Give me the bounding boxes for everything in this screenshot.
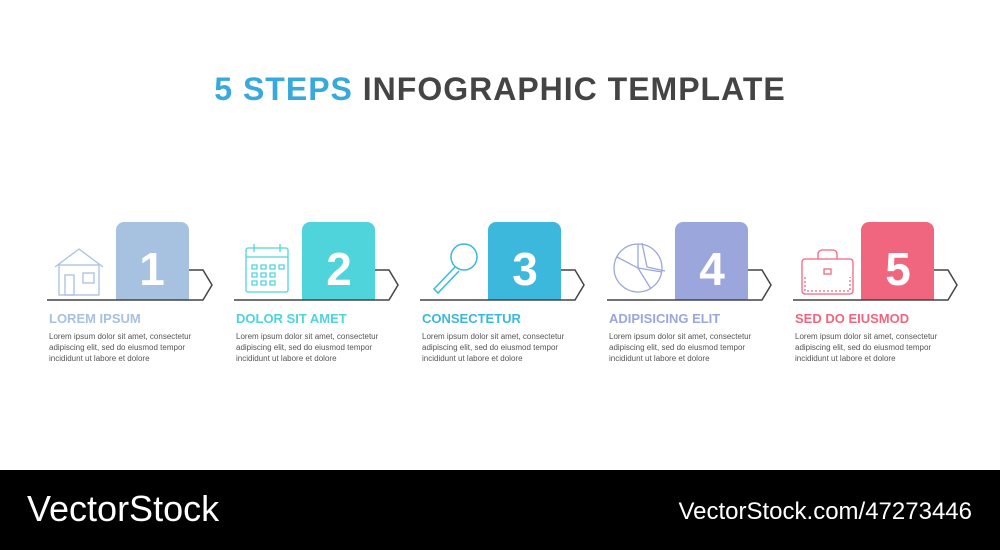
step 1 <box>47 222 213 363</box>
footer bar <box>0 470 1000 550</box>
step 4 <box>607 222 772 363</box>
step 5: Lorem ipsum dolor sit amet, consectetur adipiscing elit, sed do eiusmod tempor incididunt ut labore et dolore <box>795 332 937 363</box>
step 2: 2 <box>326 243 352 295</box>
step 4: ADIPISICING ELIT <box>609 311 720 326</box>
step 5: 5 <box>885 243 911 295</box>
title: 5 STEPS INFOGRAPHIC TEMPLATE <box>214 71 786 107</box>
step 4: Lorem ipsum dolor sit amet, consectetur adipiscing elit, sed do eiusmod tempor incididunt ut labore et dolore <box>609 332 751 363</box>
footer bar: VectorStock.com/47273446 <box>678 498 972 525</box>
step 3: Lorem ipsum dolor sit amet, consectetur adipiscing elit, sed do eiusmod tempor incididunt ut labore et dolore <box>422 332 564 363</box>
step 3: CONSECTETUR <box>422 311 521 326</box>
step 1: 1 <box>139 243 165 295</box>
step 3: 3 <box>512 243 538 295</box>
step 1: Lorem ipsum dolor sit amet, consectetur adipiscing elit, sed do eiusmod tempor incididunt ut labore et dolore <box>49 332 191 363</box>
step 2: DOLOR SIT AMET <box>236 311 347 326</box>
step 1: LOREM IPSUM <box>49 311 141 326</box>
step 5: SED DO EIUSMOD <box>795 311 909 326</box>
footer bar: VectorStock <box>27 488 219 529</box>
step 3 <box>420 222 585 363</box>
step 2 <box>234 222 399 363</box>
step 4: 4 <box>699 243 725 295</box>
step 5 <box>793 222 958 363</box>
step 2: Lorem ipsum dolor sit amet, consectetur adipiscing elit, sed do eiusmod tempor incididunt ut labore et dolore <box>236 332 378 363</box>
